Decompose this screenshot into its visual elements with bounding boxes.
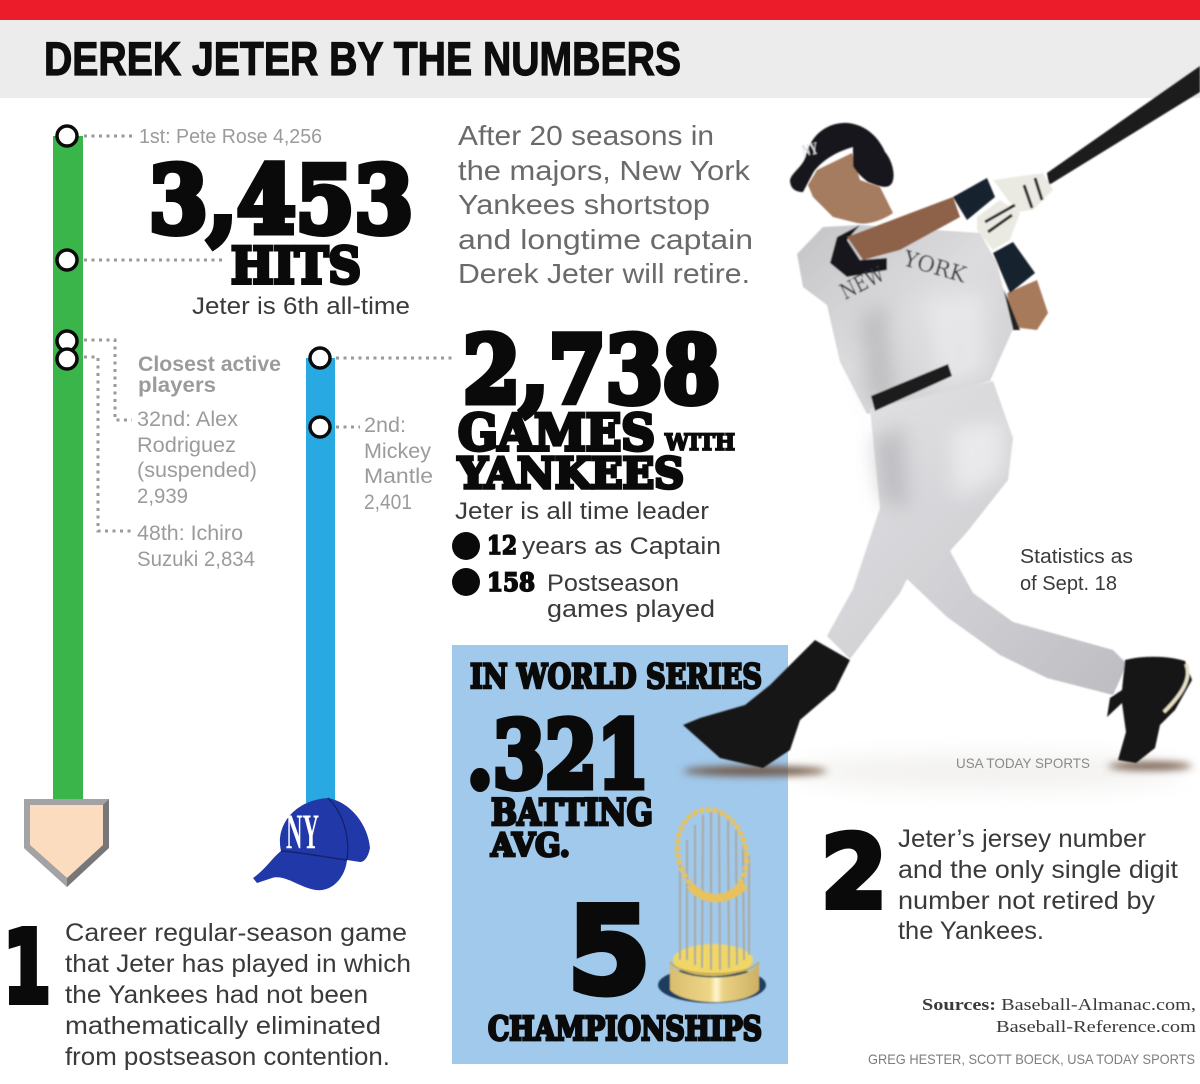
heading: hits: HITS [231,236,361,295]
photo credit: USA TODAY SPORTS [956,755,1090,771]
title: DEREK JETER BY THE NUMBERS [44,32,681,85]
text: closest active players: Rodriguez [137,434,236,457]
stat: 158 postseason [452,568,715,623]
text: closest active players: (suspended) [137,459,257,482]
stat: 158 postseason: 158 [487,568,535,597]
stat: 158 postseason: Postseason [547,570,679,597]
stat: games blue bar [306,348,456,803]
text: closest active players [137,353,281,571]
heading: games with yankees: GAMES [458,403,655,462]
text: Mickey Mantle: Mickey [364,440,432,463]
icon: Yankees cap: NY [286,803,319,859]
note: statistics [1020,546,1133,595]
stat: 12 years: 12 [487,531,517,560]
text: Mickey Mantle: 2,401 [364,491,412,514]
heading: games with yankees: WITH [664,430,735,456]
icon: Yankees cap [253,798,370,890]
intro text: After 20 seasons in [458,120,714,151]
text: jersey number: number not retired by [898,887,1156,915]
label: batting avg: BATTING [491,792,653,834]
text: jersey number: Jeter’s jersey number [898,825,1146,853]
text: Jeter is 6th: Jeter is 6th all-time [192,293,410,320]
text: closest active players: 2,939 [137,485,188,508]
number: 1: 1 [3,909,51,1026]
top red bar [0,0,1200,20]
text: jersey number: the Yankees. [898,917,1044,945]
text: closest active players: 32nd: Alex [137,408,238,431]
text: closest active players: players [138,374,216,397]
photo: Derek Jeter swinging [683,66,1200,788]
label: batting avg: AVG. [490,826,570,864]
heading: games with yankees: YANKEES [457,449,684,498]
heading: championships: CHAMPIONSHIPS [488,1009,762,1048]
text: jersey number [898,825,1178,945]
text: Mickey Mantle: Mantle [364,465,433,488]
text: career regular season game: the Yankees had not been [65,981,368,1009]
heading: in world series: IN WORLD SERIES [470,657,762,697]
number: 2: 2 [821,814,887,931]
title band [0,20,1200,98]
stat: 12 years [452,531,721,560]
note: statistics: of Sept. 18 [1020,573,1117,595]
intro text: Derek Jeter will retire. [458,258,750,289]
intro text: and longtime captain [458,224,753,255]
text: career regular season game: that Jeter has played in which [65,950,411,978]
intro text [458,120,753,289]
icon: home plate [24,799,109,887]
text: sources: Baseball-Reference.com [996,1017,1196,1036]
icon: world series trophy [658,802,766,1003]
number: 2,738: 2,738 [463,316,720,424]
stat: 158 postseason: games played [547,596,715,623]
intro text: the majors, New York [458,155,751,186]
number: .321: .321 [467,701,649,809]
panel: world series [452,645,788,1064]
photo: Derek Jeter swinging: NY [800,139,820,160]
label: batting avg [490,792,653,864]
text: career regular season game [65,919,411,1071]
heading: games with yankees [457,403,735,498]
text: career regular season game: Career regular-season game [65,919,407,947]
photo: Derek Jeter swinging: NEW [836,262,889,305]
text: jersey number: and the only single digit [898,856,1178,884]
note: statistics: Statistics as [1020,546,1133,568]
text: career regular season game: from postseason contention. [65,1043,390,1071]
text: career regular season game: mathematically eliminated [65,1012,381,1040]
photo: Derek Jeter swinging: YORK [899,246,969,289]
stat: career hits green bar [53,126,222,800]
label: Pete Rose: 1st: Pete Rose 4,256 [139,126,322,148]
text: closest active players: 48th: Ichiro [137,522,243,545]
text: sources [922,995,1196,1036]
text: closest active players: Suzuki 2,834 [137,548,255,571]
text: Mickey Mantle: 2nd: [364,414,406,437]
text: sources: Sources: Baseball-Almanac.com, [922,995,1196,1014]
text: all time leader: Jeter is all time leader [455,498,709,525]
intro text: Yankees shortstop [458,189,710,220]
number: 3,453: 3,453 [149,146,413,254]
stat: 12 years: years as Captain [522,533,721,560]
number: 5: 5 [567,883,651,1022]
text: closest active players: Closest active [138,353,281,376]
text: Mickey Mantle [364,414,433,514]
